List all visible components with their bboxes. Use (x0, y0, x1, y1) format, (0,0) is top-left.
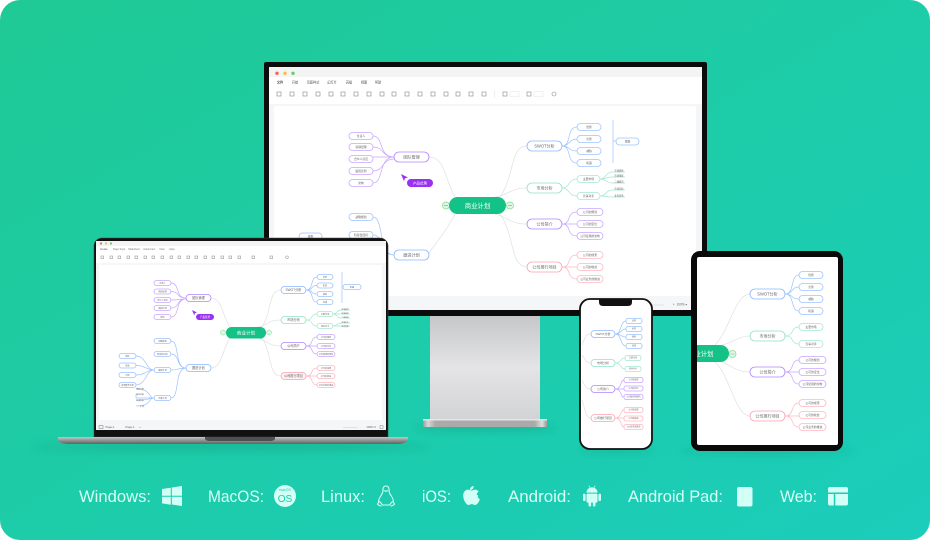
phone mind map: 公司的收益 (628, 416, 639, 420)
branch nodes right: 优势 (586, 125, 592, 129)
laptop (58, 238, 408, 444)
tablet nodes: 公司的规划 (806, 358, 820, 362)
laptop screen: Page-1 (125, 425, 135, 429)
tablet central node: 商业计划 (688, 349, 714, 358)
platform: Windows (79, 486, 182, 506)
laptop nodes right: 市场定位 (341, 320, 349, 324)
laptop nodes right: 思路 (350, 285, 355, 289)
branch nodes right: 公司的定位 (583, 222, 597, 226)
phone mind map: 劣势 (632, 327, 636, 331)
laptop nodes right: 公司使用的架构 (319, 352, 333, 356)
tablet nodes: 威胁 (808, 297, 814, 301)
branch nodes right: 业内竞争 (614, 194, 624, 198)
branch nodes right: 二线城市 (614, 180, 624, 184)
monitor screen: 页面样式 (307, 80, 320, 84)
branch nodes right: 威胁 (586, 149, 592, 153)
laptop nodes right: 业内竞争 (341, 324, 349, 328)
branch nodes right: 公司推行项目 (532, 264, 557, 270)
branch nodes right: 公司的收益 (583, 265, 597, 269)
branch nodes right: 公司业务的推进 (580, 277, 600, 281)
tablet nodes: 公司使用的架构 (803, 382, 822, 386)
tablet nodes: 公司推行项目 (755, 412, 780, 418)
branch nodes right: SWOT分析 (534, 142, 555, 148)
branch nodes right: 市场定位 (614, 186, 624, 190)
tablet nodes: 公司的成果 (806, 401, 820, 405)
laptop central node: 商业计划 (237, 329, 256, 336)
branch nodes left (299, 132, 429, 260)
tablet nodes: 优势 (808, 273, 814, 277)
monitor screen: 开始 (292, 80, 299, 84)
monitor screen: 帮助 (375, 80, 381, 84)
branch nodes right: 机遇 (586, 161, 592, 165)
branch nodes left: 阶段性目标 (354, 233, 368, 237)
laptop nodes left: 合伙人高层 (157, 298, 168, 302)
laptop nodes right: 公司推行项目 (284, 373, 303, 378)
icon: MacOS: macOS (279, 488, 291, 492)
laptop nodes right: 主要市场 (321, 312, 329, 316)
phone mind map (582, 318, 643, 430)
monitor mind map (299, 120, 639, 282)
tablet nodes: 公司业务的推进 (803, 425, 822, 429)
laptop nodes left: 股权比例 (158, 306, 167, 310)
laptop nodes right: 公司简介 (287, 343, 301, 348)
laptop nodes left: 季度计划 (136, 386, 144, 390)
laptop nodes right: 二线城市 (341, 315, 349, 319)
phone mind map: 公司的定位 (628, 386, 639, 390)
laptop nodes right: 市场趋势 (341, 307, 349, 311)
icon: Windows (162, 486, 182, 506)
laptop central node (226, 327, 266, 338)
laptop screen: Advanced (143, 247, 155, 251)
branch nodes left: 战略规划 (355, 215, 367, 219)
platform: Web: Web: (780, 487, 817, 506)
laptop nodes right: 公司的收益 (321, 374, 331, 378)
branch nodes left: 股权比例 (355, 169, 367, 173)
phone (580, 299, 652, 449)
phone mind map: 主要市场 (629, 356, 637, 360)
laptop nodes right: 公司的定位 (321, 344, 331, 348)
phone mind map: 威胁 (632, 335, 636, 339)
platform: Web (780, 487, 848, 506)
laptop nodes left: 业绩目标 (136, 398, 144, 402)
branch nodes right: 市场分析 (536, 184, 553, 190)
laptop nodes right: 公司的成果 (321, 366, 331, 370)
laptop nodes left: 阶段性目标 (157, 352, 168, 356)
platform: Windows: Windows: (79, 487, 151, 506)
laptop nodes left: 融资进度 (136, 392, 144, 396)
monitor screen (269, 67, 702, 310)
shadow: devices (32, 424, 855, 454)
platform: Linux (321, 486, 394, 506)
laptop nodes right: 劣势 (323, 283, 327, 287)
branch nodes right (527, 124, 639, 282)
icon: MacOS (274, 485, 296, 507)
phone mind map: 竞争对手 (629, 367, 637, 371)
laptop nodes right: 威胁 (323, 292, 327, 296)
laptop badge (192, 310, 214, 320)
laptop screen: Help (169, 247, 175, 251)
monitor stand (423, 316, 547, 427)
tablet central node (697, 345, 729, 362)
laptop nodes right: SWOT分析 (286, 287, 302, 292)
laptop nodes right: 市场分析 (287, 317, 301, 322)
laptop nodes left: 年度计划 (158, 396, 167, 400)
branch nodes left: 跟进计划 (403, 252, 420, 258)
badge: product: 产品优势 (413, 180, 428, 185)
laptop nodes right: 优势 (323, 275, 327, 279)
branch nodes left: 合伙人高层 (354, 157, 368, 161)
laptop screen: + (139, 425, 141, 429)
laptop nodes right: 机遇 (323, 300, 327, 304)
phone mind map: 公司使用的架构 (626, 395, 641, 399)
branch nodes left: 营销经理 (355, 145, 367, 149)
tablet nodes: 公司的收益 (806, 413, 820, 417)
laptop nodes left: 资源整合计划 (121, 383, 134, 387)
monitor screen: 文件 (277, 80, 284, 84)
tablet nodes: 机遇 (808, 309, 814, 313)
branch nodes right: 劣势 (586, 137, 592, 141)
laptop screen: Slideshow (128, 247, 140, 251)
laptop nodes left: 战略规划 (158, 339, 167, 343)
branch nodes left: 规划 (308, 234, 313, 238)
laptop nodes left: 融资计划 (158, 368, 167, 372)
tablet nodes: 市场分析 (759, 332, 776, 338)
tablet (691, 251, 843, 451)
branch nodes right: 主要市场 (583, 177, 594, 181)
monitor screen: 幻灯片 (327, 80, 337, 84)
laptop nodes left: 跟进计划 (192, 365, 205, 370)
branch nodes right: 公司简介 (536, 220, 553, 226)
laptop nodes right: 竞争对手 (321, 324, 329, 328)
central node: 商业计划 (465, 201, 490, 210)
monitor screen: 高级 (346, 80, 353, 84)
laptop mind map (119, 272, 361, 408)
platform: Android Pad: Android Pad: (628, 487, 723, 506)
icon: MacOS: OS (278, 494, 293, 505)
laptop screen: Home (100, 247, 108, 251)
platform: MacOS: MacOS: (208, 487, 264, 506)
phone mind map: 机遇 (632, 344, 636, 348)
laptop nodes right: 公司业务的推进 (319, 383, 333, 387)
icon: Web (828, 487, 848, 506)
platform: Linux: Linux: (321, 487, 365, 506)
laptop screen: 100% ▾ (366, 425, 376, 429)
phone mind map: 公司的规划 (628, 378, 639, 382)
phone mind map: 公司的成果 (628, 408, 639, 412)
branch nodes right: 市场现状 (614, 174, 624, 178)
tablet nodes: 公司简介 (759, 368, 776, 374)
phone mind map: 公司推行项目 (594, 415, 612, 420)
branch nodes right: 市场趋势 (614, 168, 624, 172)
laptop screen (96, 241, 386, 430)
laptop nodes left: 扩张 (140, 404, 144, 408)
platform: iOS: iOS: (422, 487, 451, 506)
laptop screen: Page Style (113, 247, 126, 251)
laptop screen: View (159, 247, 165, 251)
branch nodes right: 公司的成果 (583, 253, 597, 257)
phone mind map: 市场分析 (597, 360, 609, 365)
tablet nodes: 公司的定位 (806, 370, 820, 374)
branch nodes right: 公司的规划 (583, 210, 597, 214)
phone mind map: 优势 (632, 319, 636, 323)
platform: Android: Android: (508, 487, 571, 506)
platform: MacOS (208, 485, 296, 507)
badge: product (401, 174, 433, 187)
branch nodes right: 竞争对手 (583, 194, 594, 198)
laptop nodes left: 营销经理 (158, 289, 167, 293)
laptop nodes right (281, 274, 361, 388)
branch nodes left: 团队管理 (403, 154, 420, 160)
icon: Pad (737, 487, 752, 506)
central node (449, 197, 506, 214)
phone mind map: SWOT分析 (596, 331, 610, 336)
tablet nodes (750, 272, 826, 430)
laptop screen: Page-1 (105, 425, 115, 429)
icon: Apple (463, 486, 480, 505)
platform: iOS (422, 486, 480, 506)
monitor (264, 62, 707, 316)
phone mind map: 公司业务的推进 (626, 425, 641, 429)
laptop nodes right: 市场现状 (341, 311, 349, 315)
tablet nodes: SWOT分析 (757, 290, 778, 296)
tablet nodes: 主要市场 (805, 325, 817, 329)
laptop base (58, 437, 408, 444)
platform: Android (508, 486, 601, 506)
laptop nodes right: 公司的规划 (321, 335, 331, 339)
laptop nodes left: 团队 (125, 354, 130, 358)
laptop nodes left: 资金 (125, 363, 130, 367)
branch nodes right: 思路 (625, 140, 630, 144)
branch nodes left: 架构 (358, 181, 364, 185)
laptop nodes left: 团队管理 (192, 295, 206, 300)
laptop nodes left: 架构 (160, 315, 165, 319)
icon: Android (583, 486, 601, 506)
monitor screen: + 100% ▾ (673, 302, 688, 306)
monitor screen: 视图 (361, 80, 367, 84)
icon: Linux penguin (378, 486, 394, 506)
laptop badge: 产品优势 (200, 315, 211, 319)
tablet mind map (697, 271, 826, 431)
laptop nodes left: 负责人 (159, 281, 166, 285)
branch nodes right: 公司使用的架构 (580, 234, 600, 238)
phone mind map: 公司简介 (597, 386, 609, 391)
tablet nodes: 劣势 (808, 285, 814, 289)
tablet nodes: 竞争对手 (805, 342, 817, 346)
laptop nodes left: 市场 (125, 373, 130, 377)
laptop nodes left (119, 280, 211, 408)
branch nodes left: 负责人 (357, 134, 365, 138)
